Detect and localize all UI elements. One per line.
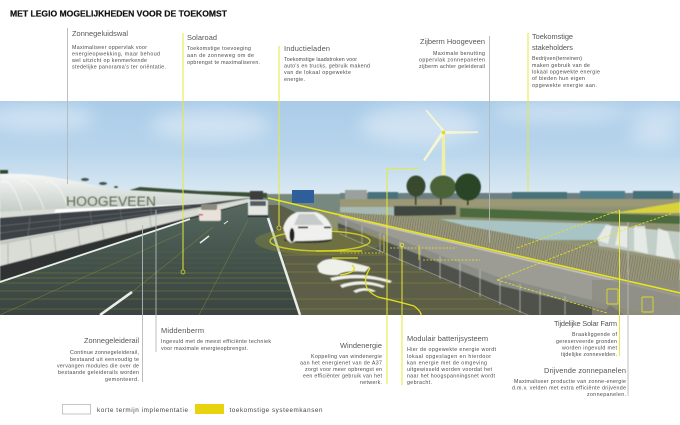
body: [72, 45, 166, 70]
body: [419, 51, 485, 70]
heading: Middenberm: [161, 326, 204, 335]
leader line: [142, 225, 144, 382]
callout: Zonnegeluidswal: [68, 28, 166, 184]
body: gebracht.: [407, 380, 432, 386]
blue gantry sign: [292, 190, 314, 203]
sky: [0, 101, 680, 201]
body: [407, 347, 497, 386]
leader line: [627, 222, 629, 396]
body: netwerk.: [360, 380, 382, 386]
heading: Zonnegeluidswal: [72, 29, 128, 38]
body: gemonteerd.: [105, 377, 139, 383]
body: Koppeling van windenergie: [311, 354, 382, 360]
leader line: [618, 210, 620, 356]
body: Maximale benutting: [433, 51, 485, 57]
body: [512, 379, 626, 398]
landscape right of road: [262, 190, 680, 316]
solar road grid: [0, 220, 300, 317]
leader line: [155, 210, 157, 352]
body: lokaal opgeslagen en hierdoor: [407, 354, 491, 360]
body: lokaal opgewekte energie: [532, 70, 600, 76]
anchor dot: [181, 270, 185, 274]
solar panels: [0, 198, 250, 241]
car: white tesla: [283, 212, 332, 243]
lane markings: [0, 218, 530, 315]
car: white hatchback: [199, 204, 221, 221]
body: een efficiënter gebruik van het: [303, 374, 383, 380]
anchor dot: [400, 243, 404, 247]
callout: Modulair batterijsysteem: [400, 243, 497, 386]
callout: Windenergie: [300, 168, 419, 386]
body: [556, 332, 618, 358]
legend label: short term: korte termijn implementatie: [97, 407, 188, 414]
body: stedelijke panorama's ter oriëntatie.: [72, 64, 166, 70]
heading: Windenergie: [340, 341, 382, 350]
cars: [199, 191, 332, 243]
body: bestaande geleiderails worden: [58, 370, 139, 376]
body: [532, 56, 600, 89]
battery icon right: [642, 297, 653, 312]
yellow system outlines: [268, 198, 680, 313]
body: energieopwekking, maar behoud: [72, 52, 160, 58]
body: vervangen modules die over de: [57, 364, 139, 370]
body: aan de zonneweg om de: [187, 53, 254, 59]
wireless car symbol: [317, 259, 392, 293]
body: kan energie met de omgeving: [407, 360, 487, 366]
body: Continue zonnegeleiderail,: [70, 350, 139, 356]
battery icon left: [607, 289, 618, 304]
heading: Zijberm Hoogeveen: [420, 37, 485, 46]
callout: Middenberm: [156, 210, 271, 352]
legend swatch: future: [195, 404, 224, 414]
reeds: [342, 214, 680, 280]
body: opbrengst te maximaliseren.: [187, 60, 260, 66]
callout: Tijdelijke Solar Farm: [554, 210, 620, 358]
body: energie.: [284, 77, 305, 83]
right lane grid: [270, 255, 530, 309]
legend label: future: toekomstige systeemkansen: [230, 407, 323, 414]
left noise wall: [0, 174, 250, 218]
wind turbine: [423, 110, 478, 176]
body: [284, 57, 370, 83]
road surface: [0, 203, 300, 315]
callout: Zijberm Hoogeveen: [419, 36, 490, 243]
callout: Toekomstige stakeholders: [528, 32, 600, 191]
heading: Zonnegeleiderail: [84, 336, 139, 345]
heading: Solaroad: [187, 33, 217, 42]
left barrier: [0, 198, 250, 282]
body: aan het energienet van de A37: [300, 360, 382, 366]
body: Toekomstige toevoeging: [187, 46, 251, 52]
body: opgewekte energie aan.: [532, 83, 597, 89]
wall lettering: HOOGEVEEN: [66, 194, 156, 209]
body: oppervlak zonnepanelen: [419, 58, 485, 64]
callout: Zonnegeleiderail: [57, 225, 142, 383]
right tube barrier: [338, 215, 680, 320]
body: Ingevuld met de meest efficiënte techniek: [161, 339, 271, 345]
body: auto's en trucks, gebruik makend: [284, 64, 370, 70]
body: wel uitzicht op kenmerkende: [72, 58, 147, 64]
body: van de lokaal opgewekte: [284, 70, 351, 76]
callout: Drijvende zonnepanelen: [512, 222, 628, 398]
battery box zone: [592, 280, 680, 315]
body: worden ingevuld met: [562, 346, 618, 352]
leader line with dot: [182, 33, 184, 270]
legend: [62, 404, 323, 414]
leader line: [401, 246, 403, 385]
callout: Inductieladen: [277, 44, 370, 230]
leader line: [278, 46, 280, 226]
body: of bieden hun eigen: [532, 76, 585, 82]
callout: Solaroad: [181, 33, 260, 274]
body: Hier de opgewekte energie wordt: [407, 347, 497, 353]
reed hatching: [340, 218, 680, 276]
heading: Modulair batterijsysteem: [407, 334, 488, 343]
leader line: [387, 168, 419, 384]
body: zijberm achter geleiderail: [419, 64, 485, 70]
trees: [406, 174, 481, 205]
body: uitgewisseld worden voordat het: [407, 367, 493, 373]
leader line: [488, 36, 490, 243]
body: Braakliggende of: [572, 332, 618, 338]
body: [57, 350, 139, 383]
body: Maximaliseer oppervlak voor: [72, 45, 147, 51]
leader line: [527, 33, 529, 191]
heading: Tijdelijke Solar Farm: [554, 319, 617, 328]
inductive charging rings: [255, 227, 385, 255]
body: zorgt voor meer opbrengst en: [305, 367, 382, 373]
legend swatch: short term: [62, 404, 90, 414]
body: Maximaliseer productie van zonne-energie: [514, 379, 626, 385]
heading: Inductieladen: [284, 44, 330, 53]
leader line: [66, 28, 68, 184]
body: [187, 46, 260, 66]
body: d.m.v. velden met extra efficiënte drijvende: [512, 386, 626, 392]
body: zonnepanelen.: [587, 392, 626, 398]
body: [161, 339, 271, 352]
photo: highway scene: [0, 101, 680, 320]
distant tree line: [0, 170, 267, 198]
car: truck and suv: [248, 191, 268, 217]
body: naar het hoogspanningsnet wordt: [407, 374, 496, 380]
body: Toekomstige laadstroken voor: [284, 57, 357, 63]
body: voor maximale energieopbrengst.: [161, 346, 248, 352]
body: [300, 354, 383, 386]
body: gereserveerde gronden: [556, 339, 617, 345]
heading: Toekomstige: [532, 32, 573, 41]
title: MET LEGIO MOGELIJKHEDEN VOOR DE TOEKOMST: [10, 8, 228, 18]
heading: Drijvende zonnepanelen: [544, 366, 626, 375]
body: tijdelijke zonnevelden.: [561, 352, 617, 358]
body: Bedrijven(terreinen): [532, 56, 582, 62]
body: maken gebruik van de: [532, 63, 590, 69]
anchor dot: [277, 226, 281, 230]
heading line 2: stakeholders: [532, 43, 573, 52]
charging cable squiggle: [316, 251, 421, 316]
body: bestaand uit eenvoudig te: [70, 357, 139, 363]
